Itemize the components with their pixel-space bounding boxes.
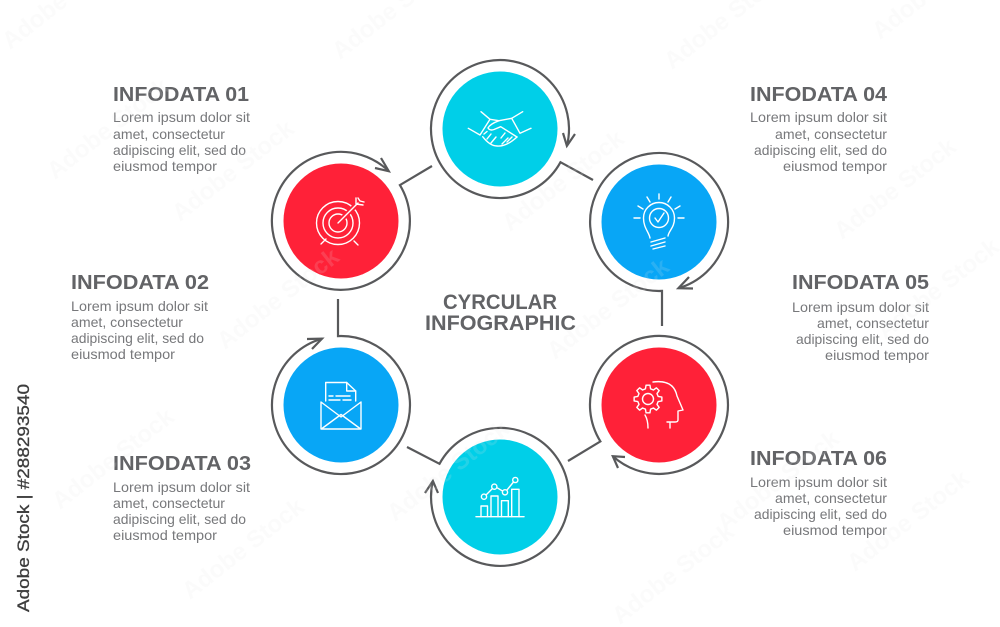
text block: infodata 03: INFODATA 03: [113, 453, 251, 475]
text block: infodata 05: Lorem ipsum dolor sit: [792, 299, 929, 315]
text block: infodata 01: Lorem ipsum dolor sit: [113, 109, 250, 125]
text block: infodata 04: amet, consectetur: [775, 126, 887, 142]
text block: infodata 01: eiusmod tempor: [113, 158, 217, 174]
text block: infodata 02: adipiscing elit, sed do: [71, 330, 204, 346]
icon: target with arrow: [316, 198, 364, 245]
red disc 1: [284, 164, 398, 278]
arrow ring 1: [272, 152, 432, 290]
text block: infodata 02: eiusmod tempor: [71, 346, 175, 362]
panel: step 4 head and gear circle: [568, 336, 728, 474]
text block: infodata 03: amet, consectetur: [113, 495, 225, 511]
icon: head with gear: [634, 382, 683, 428]
icon: envelope with document: [321, 382, 361, 429]
panel: step 5 chart circle: [407, 428, 569, 566]
icon: bar chart with trend line: [476, 477, 524, 517]
text block: infodata 04: INFODATA 04: [750, 84, 888, 106]
text block: infodata 01: adipiscing elit, sed do: [113, 142, 246, 158]
panel: step 3 light bulb circle: [590, 153, 728, 326]
watermark: faint diagonal pattern: Adobe Stock: [607, 518, 740, 627]
watermark: faint diagonal pattern: Adobe Stock: [42, 73, 175, 185]
watermark: faint diagonal pattern: Adobe Stock: [212, 243, 345, 355]
text block: infodata 02: [71, 272, 209, 362]
text block: infodata 05: [792, 272, 929, 363]
text block: infodata 05: eiusmod tempor: [825, 347, 929, 363]
arrow ring 5: [407, 428, 569, 566]
watermark: stock id on left edge: Adobe Stock | #288293540: [14, 384, 33, 612]
watermark: faint diagonal pattern: Adobe Stock: [497, 125, 630, 237]
text block: infodata 06: Lorem ipsum dolor sit: [750, 474, 887, 490]
arrow ring 4: [568, 336, 728, 474]
watermark: faint diagonal pattern: Adobe Stock: [167, 115, 300, 227]
text block: infodata 01: INFODATA 01: [113, 84, 249, 106]
watermark: faint diagonal pattern: Adobe Stock: [829, 133, 962, 245]
text block: infodata 05: amet, consectetur: [817, 315, 929, 331]
text block: infodata 06: eiusmod tempor: [783, 522, 887, 538]
title: cyrcular infographic: CYRCULAR: [443, 291, 557, 314]
panel: step 6 envelope circle: [272, 299, 410, 474]
arrow ring 3: [590, 153, 728, 326]
watermark: faint diagonal pattern: Adobe Stock: [382, 415, 515, 527]
text block: infodata 05: adipiscing elit, sed do: [796, 331, 929, 347]
arrow ring 2: [431, 60, 593, 198]
watermark: faint diagonal pattern: Adobe Stock: [47, 403, 180, 515]
text block: infodata 04: adipiscing elit, sed do: [754, 142, 887, 158]
cyan disc 2: [442, 72, 558, 186]
text block: infodata 06: adipiscing elit, sed do: [754, 506, 887, 522]
title: cyrcular infographic: [425, 291, 576, 335]
watermark: faint diagonal pattern: Adobe Stock: [177, 493, 310, 605]
text block: infodata 03: [113, 453, 251, 543]
text block: infodata 06: INFODATA 06: [750, 448, 887, 470]
text block: infodata 01: [113, 84, 250, 174]
text block: infodata 06: [750, 448, 887, 538]
text block: infodata 03: adipiscing elit, sed do: [113, 511, 246, 527]
text block: infodata 02: INFODATA 02: [71, 272, 209, 294]
icon: handshake: [468, 112, 531, 146]
red disc 4: [602, 348, 716, 462]
text block: infodata 04: [750, 84, 888, 174]
arrow ring 6: [272, 299, 410, 474]
cyan disc 5: [442, 440, 558, 554]
panel: step 1 target circle: [272, 152, 432, 290]
text block: infodata 05: INFODATA 05: [792, 272, 929, 294]
text block: infodata 03: eiusmod tempor: [113, 527, 217, 543]
watermark: faint diagonal pattern: Adobe Stock: [542, 253, 675, 365]
blue disc 3: [602, 164, 716, 280]
text block: infodata 06: amet, consectetur: [775, 490, 887, 506]
text block: infodata 04: Lorem ipsum dolor sit: [750, 109, 887, 125]
text block: infodata 04: eiusmod tempor: [783, 158, 887, 174]
text block: infodata 01: amet, consectetur: [113, 126, 225, 142]
text block: infodata 02: amet, consectetur: [71, 314, 183, 330]
watermark: faint diagonal pattern: Adobe Stock: [712, 425, 845, 537]
title: cyrcular infographic: INFOGRAPHIC: [425, 312, 576, 335]
icon: light bulb with check: [634, 194, 684, 249]
text block: infodata 02: Lorem ipsum dolor sit: [71, 298, 208, 314]
text block: infodata 03: Lorem ipsum dolor sit: [113, 479, 250, 495]
panel: step 2 handshake circle: [431, 60, 593, 198]
blue disc 6: [284, 348, 398, 462]
watermark: faint diagonal pattern: Adobe Stock: [842, 465, 975, 577]
